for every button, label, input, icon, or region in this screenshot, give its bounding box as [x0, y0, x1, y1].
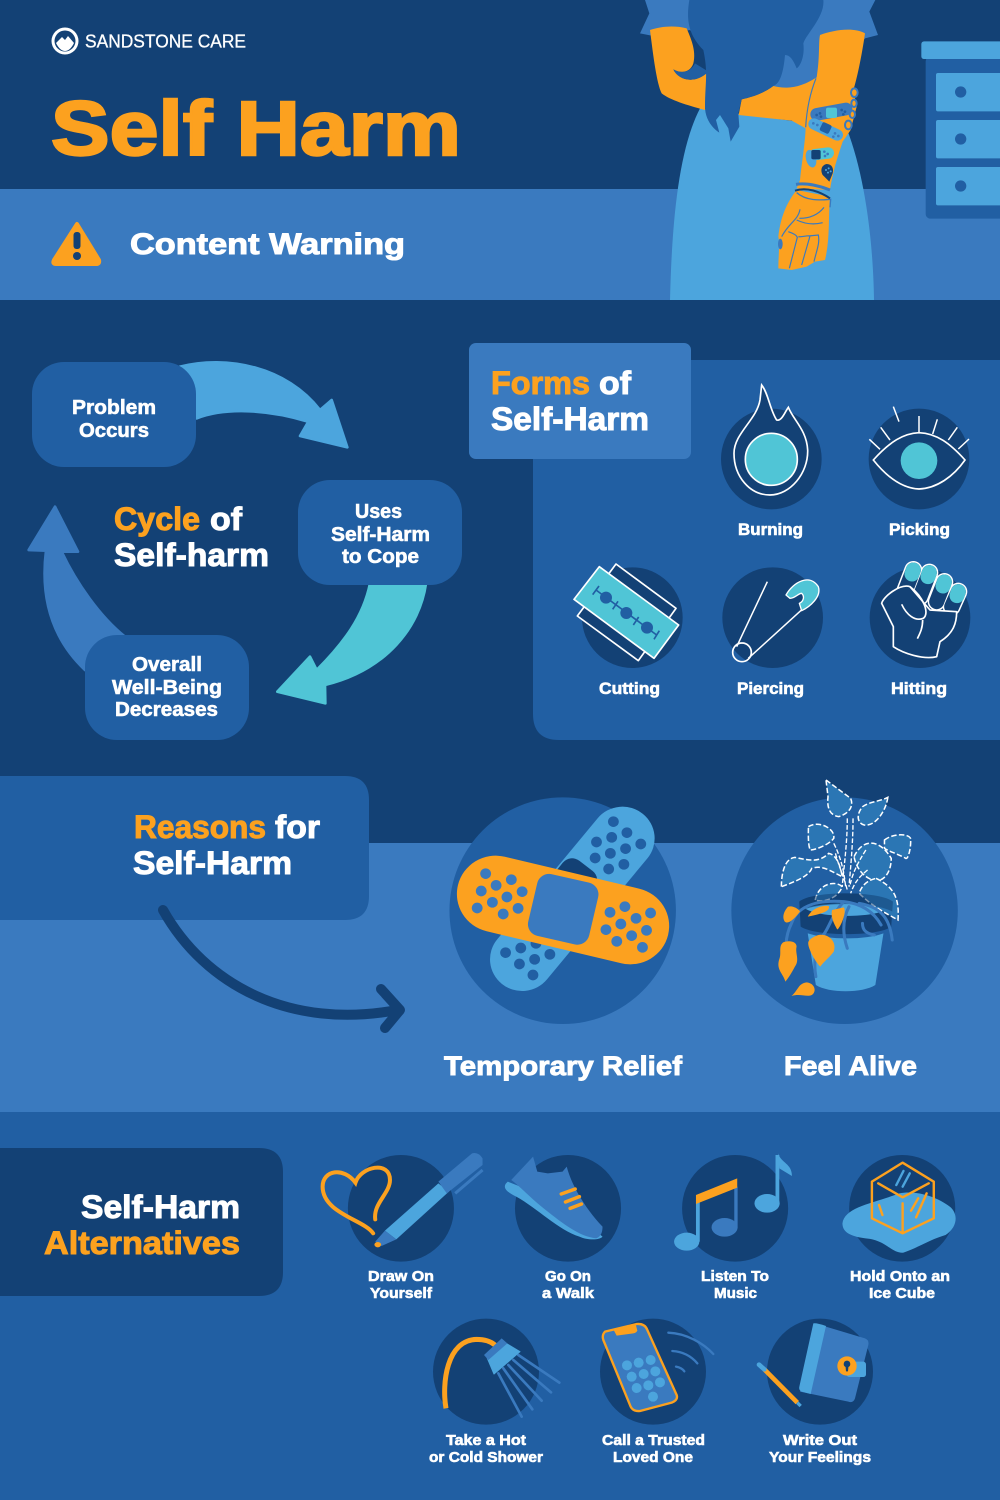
- label: write out your feelings: [769, 1432, 871, 1466]
- label: call a trusted loved one: Call a Trusted: [602, 1432, 705, 1449]
- illustration: figure with bandaged arm: [640, 0, 878, 300]
- heading: self-harm alternatives: Alternatives: [44, 1225, 240, 1261]
- icon: piercing: [722, 567, 823, 668]
- hand: [778, 190, 830, 270]
- bandage one: [817, 109, 846, 114]
- label: shower: or Cold Shower: [429, 1449, 543, 1466]
- icon: draw on yourself: [323, 1153, 483, 1262]
- label: draw on yourself: Draw On: [368, 1268, 434, 1285]
- label: write out your feelings: Write Out: [783, 1432, 857, 1449]
- heading: forms of self-harm: Forms: [491, 365, 590, 401]
- logo: Sandstone Care: SANDSTONE CARE: [85, 30, 246, 52]
- heading: content warning: Content Warning: [130, 228, 405, 261]
- step: uses self-harm: to Cope: [342, 546, 419, 568]
- wrist bands: [796, 184, 830, 190]
- panel: self-harm alternatives: [0, 1148, 956, 1466]
- step: uses self-harm: Uses: [355, 501, 402, 523]
- icon: picking: [869, 407, 969, 509]
- icon: warning triangle: [53, 224, 99, 264]
- logo: Sandstone Care: [52, 28, 246, 54]
- label: draw on yourself: [368, 1268, 434, 1302]
- knuckle marks: [845, 88, 858, 129]
- label: hold onto an ice cube: [850, 1268, 950, 1302]
- icon: go on a walk: [505, 1155, 621, 1262]
- label: go on a walk: [542, 1268, 595, 1302]
- step: problem occurs: Problem: [72, 397, 156, 419]
- title: Self Harm: [51, 86, 461, 172]
- icon: hitting: [870, 567, 970, 668]
- heading: reasons for self-harm: Self-Harm: [133, 845, 292, 881]
- heading: forms of self-harm: of: [599, 365, 631, 401]
- heading: cycle of self-harm: of: [210, 501, 242, 537]
- label: temporary relief: Temporary Relief: [444, 1051, 683, 1081]
- heading: reasons for self-harm: for: [275, 809, 320, 845]
- label: piercing: Piercing: [737, 680, 804, 698]
- label: shower: [429, 1432, 543, 1466]
- label: go on a walk: Go On: [545, 1268, 591, 1285]
- arrow: well-being to problem: [29, 507, 125, 670]
- illustration: dresser: [921, 41, 1000, 219]
- heading: cycle of self-harm: Cycle: [114, 501, 200, 537]
- heading: self-harm alternatives: [44, 1189, 240, 1261]
- icon: journal and pencil: [759, 1319, 873, 1425]
- icon: ice cube: [842, 1155, 956, 1262]
- bandage two: [814, 124, 837, 135]
- heading: reasons for self-harm: [133, 809, 320, 881]
- label: hold onto an ice cube: Ice Cube: [869, 1285, 935, 1302]
- heading: self-harm alternatives: Self-Harm: [81, 1189, 240, 1225]
- arrow: coping to well-being: [277, 583, 426, 703]
- icon: shower: [433, 1319, 559, 1425]
- label: burning: Burning: [738, 521, 803, 539]
- step: uses self-harm: Self-Harm: [331, 524, 430, 546]
- heading: cycle of self-harm: [114, 501, 269, 573]
- step: problem occurs: Occurs: [79, 420, 149, 442]
- bandage three: [815, 153, 828, 155]
- icon: listen to music: [674, 1153, 792, 1262]
- right arm: [739, 30, 865, 190]
- label: picking: Picking: [889, 521, 950, 539]
- label: listen to music: [701, 1268, 769, 1302]
- label: draw on yourself: Yourself: [370, 1285, 433, 1302]
- icon: wilting plant: [731, 780, 958, 1024]
- arrow: problem to coping: [180, 362, 347, 447]
- label: call a trusted loved one: [602, 1432, 705, 1466]
- step: well-being decreases: Overall: [132, 654, 202, 676]
- heading: forms of self-harm: [469, 343, 691, 459]
- label: hitting: Hitting: [891, 680, 947, 698]
- icon: phone call: [600, 1319, 713, 1425]
- step: uses self-harm: [298, 480, 462, 585]
- label: go on a walk: a Walk: [542, 1285, 595, 1302]
- arrow: curved to reasons: [163, 910, 400, 1028]
- label: hold onto an ice cube: Hold Onto an: [850, 1268, 950, 1285]
- hair: [688, 0, 823, 142]
- step: well-being decreases: Decreases: [115, 699, 218, 721]
- label: listen to music: Listen To: [701, 1268, 769, 1285]
- label: shower: Take a Hot: [446, 1432, 526, 1449]
- step: well-being decreases: Well-Being: [112, 677, 222, 699]
- label: listen to music: Music: [714, 1285, 757, 1302]
- step: well-being decreases: [85, 635, 249, 740]
- label: cutting: Cutting: [599, 680, 660, 698]
- panel: reasons for self-harm: [0, 776, 958, 1081]
- heading: reasons for self-harm: Reasons: [134, 809, 266, 845]
- label: write out your feelings: Your Feelings: [769, 1449, 871, 1466]
- icon: burning: [721, 385, 822, 509]
- label: feel alive: Feel Alive: [784, 1051, 917, 1081]
- cycle diagram: [29, 362, 462, 740]
- icon: crossed bandages: [449, 797, 676, 1024]
- label: call a trusted loved one: Loved One: [613, 1449, 693, 1466]
- dress: [670, 108, 874, 300]
- shirt: [640, 0, 878, 100]
- heading: cycle of self-harm: Self-harm: [114, 537, 269, 573]
- bandage four: [821, 164, 833, 182]
- heading: forms of self-harm: Self-Harm: [491, 401, 649, 437]
- left arm: [650, 27, 708, 110]
- icon: cutting: [574, 564, 683, 668]
- panel: forms of self-harm: [469, 343, 1000, 740]
- step: problem occurs: [32, 362, 196, 467]
